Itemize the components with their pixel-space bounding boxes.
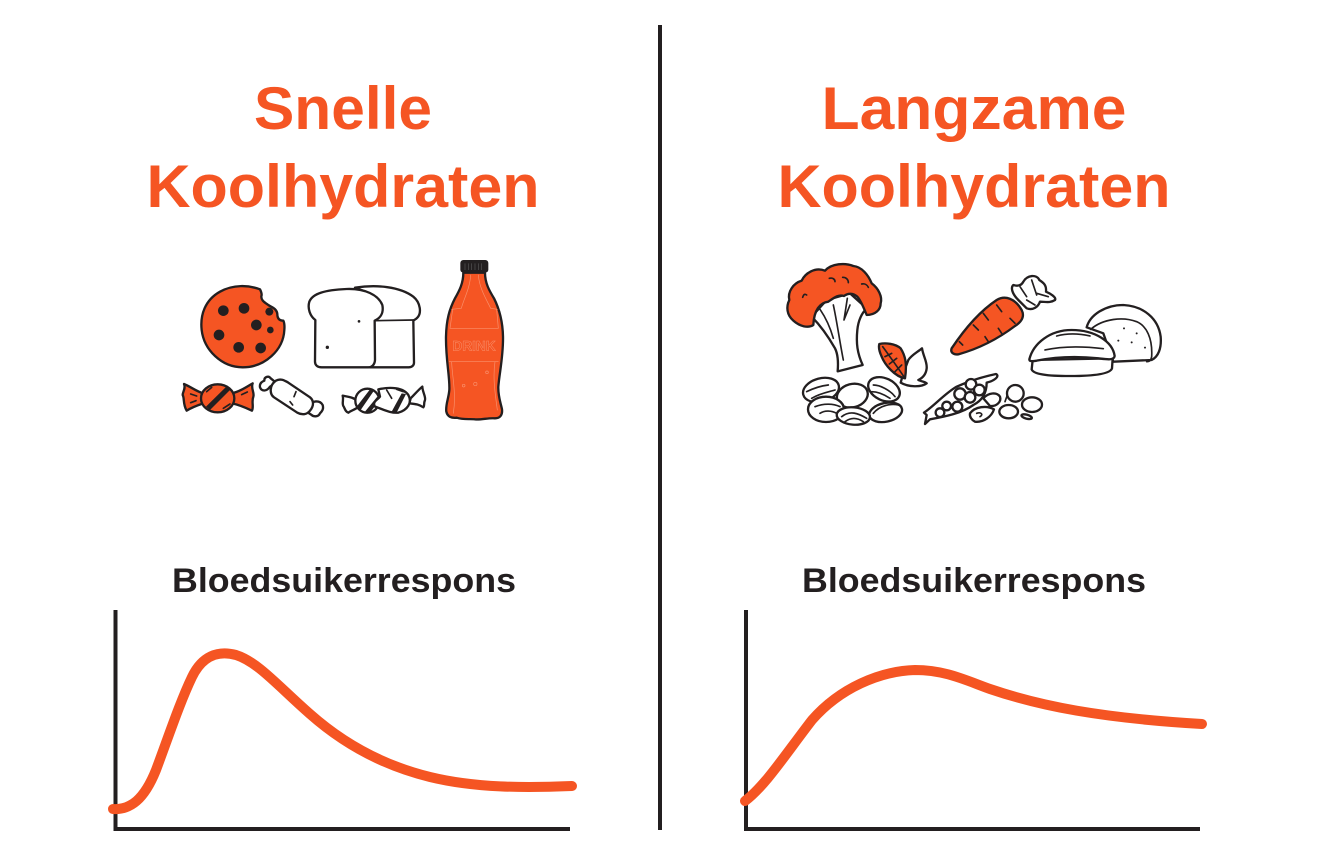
icon: leaf and seed [879, 343, 927, 386]
icon: bread loaf [309, 286, 420, 367]
panel: slow carbohydrates [745, 75, 1202, 829]
chart: fast blood sugar response [113, 610, 572, 829]
icon: soda bottle: DRINK [452, 338, 496, 354]
icon: carrot [951, 276, 1055, 354]
icons: fast carbohydrate foods [183, 260, 503, 419]
title: Snelle Koolhydraten [146, 75, 540, 220]
icon: bread rolls [1029, 305, 1161, 376]
title: Snelle Koolhydraten: Koolhydraten [146, 153, 540, 220]
icon: cookie [201, 286, 285, 367]
heading: Bloedsuikerrespons: Bloedsuikerrespons [802, 562, 1146, 600]
title: Langzame Koolhydraten: Langzame [822, 75, 1126, 142]
icon: broccoli [787, 264, 881, 371]
center divider [658, 25, 662, 830]
icon: white wrapped candy [260, 377, 323, 416]
chart: slow blood sugar response [745, 610, 1202, 829]
title: Langzame Koolhydraten [778, 75, 1170, 220]
icon: nuts [800, 372, 904, 426]
icon: orange wrapped candy [183, 383, 254, 412]
icon: striped candies [343, 387, 425, 413]
heading: Bloedsuikerrespons: Bloedsuikerrespons [172, 562, 516, 600]
icons: slow carbohydrate foods [787, 264, 1161, 426]
panel: fast carbohydrates [113, 75, 572, 829]
title: Snelle Koolhydraten: Snelle [254, 75, 432, 142]
icon: pea pod and beans [924, 374, 1042, 424]
title: Langzame Koolhydraten: Koolhydraten [778, 153, 1170, 220]
icon: soda bottle [446, 260, 503, 419]
